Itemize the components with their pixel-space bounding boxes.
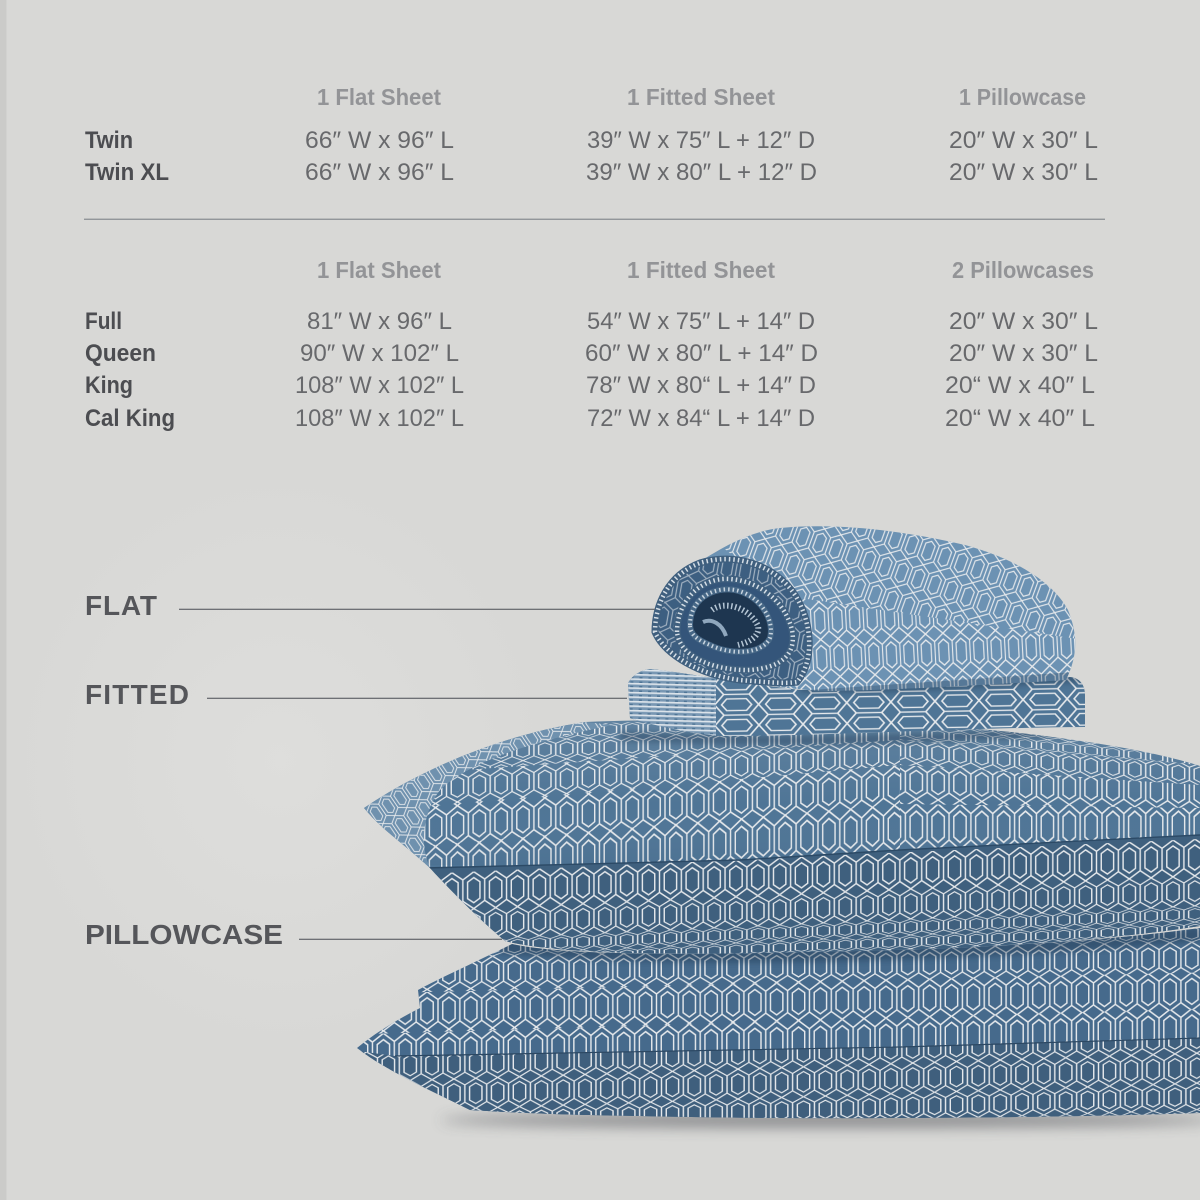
row: twin: 20″ W x 30″ L <box>949 127 1098 154</box>
header: 1 fitted sheet: 1 Fitted Sheet <box>627 257 775 283</box>
row: king: 78″ W x 80“ L + 14″ D <box>586 372 816 399</box>
lower pillow <box>357 928 1200 1118</box>
row: twin xl <box>85 159 1098 186</box>
callout: flat: FLAT <box>85 590 157 621</box>
row: king <box>85 372 1095 399</box>
row: queen: Queen <box>85 340 156 367</box>
row: cal king: 20“ W x 40″ L <box>945 405 1095 432</box>
header: 1 flat sheet: 1 Flat Sheet <box>317 84 441 110</box>
rolled fitted sheet <box>652 526 1076 691</box>
row: twin xl: Twin XL <box>85 159 169 186</box>
row: twin xl: 39″ W x 80″ L + 12″ D <box>586 159 817 186</box>
row: full: Full <box>85 308 122 335</box>
row: twin xl: 20″ W x 30″ L <box>949 159 1098 186</box>
pillow flap <box>364 722 612 868</box>
row: twin: Twin <box>85 127 133 154</box>
row: king: King <box>85 372 133 399</box>
callout: pillowcase: PILLOWCASE <box>85 919 283 950</box>
row: twin <box>85 127 1098 154</box>
row: cal king: 72″ W x 84“ L + 14″ D <box>587 405 815 432</box>
floor shadow <box>440 1113 1200 1127</box>
header: 1 pillowcase: 1 Pillowcase <box>959 84 1086 110</box>
row: cal king <box>85 405 1095 432</box>
row: twin: 39″ W x 75″ L + 12″ D <box>587 127 815 154</box>
folded flat sheet <box>628 669 1085 736</box>
upper pillow <box>350 710 1200 965</box>
row: full: 20″ W x 30″ L <box>949 308 1098 335</box>
row: full: 81″ W x 96″ L <box>307 308 452 335</box>
size table: full and larger sizes <box>85 257 1098 432</box>
header: 1 fitted sheet: 1 Fitted Sheet <box>627 84 775 110</box>
spiral roll end <box>655 559 809 683</box>
row: cal king: 108″ W x 102″ L <box>295 405 464 432</box>
row: cal king: Cal King <box>85 405 175 432</box>
row: queen <box>85 340 1098 367</box>
header: 2 pillowcases: 2 Pillowcases <box>952 257 1094 283</box>
row: queen: 60″ W x 80″ L + 14″ D <box>585 340 818 367</box>
row: queen: 90″ W x 102″ L <box>300 340 459 367</box>
size table: twin sizes <box>85 84 1098 186</box>
row: full: 54″ W x 75″ L + 14″ D <box>587 308 815 335</box>
callout: fitted: FITTED <box>85 679 189 710</box>
row: king: 108″ W x 102″ L <box>295 372 464 399</box>
row: twin xl: 66″ W x 96″ L <box>305 159 454 186</box>
header: 1 flat sheet: 1 Flat Sheet <box>317 257 441 283</box>
row: queen: 20″ W x 30″ L <box>949 340 1098 367</box>
row: twin: 66″ W x 96″ L <box>305 127 454 154</box>
row: king: 20“ W x 40″ L <box>945 372 1095 399</box>
row: full <box>85 308 1098 335</box>
